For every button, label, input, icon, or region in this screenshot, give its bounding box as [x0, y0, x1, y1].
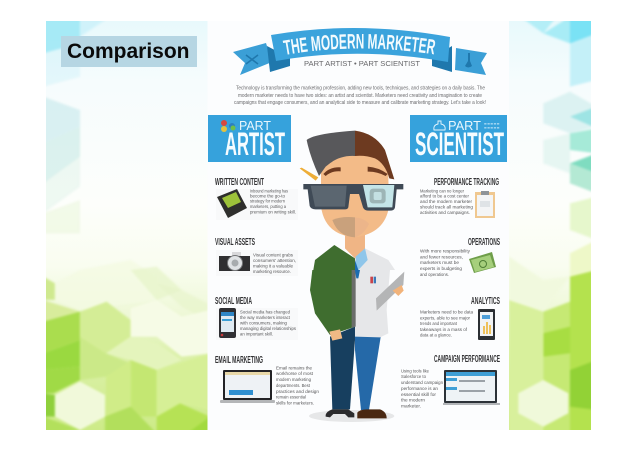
- section: email marketing: modern marketing: [276, 377, 311, 383]
- section: operations: With more responsibility: [420, 248, 471, 254]
- slide background: [43, 17, 597, 433]
- section: analytics: data at a glance.: [420, 332, 452, 338]
- icon: money: [469, 252, 496, 273]
- section: email marketing: EMAIL MARKETING: [215, 355, 263, 366]
- part scientist banner: ▪▪▪▪▪: [484, 121, 501, 126]
- section: campaign performance: essential skill for: [401, 392, 436, 398]
- section: written content: strategy for modern: [250, 198, 285, 204]
- infographic panel: [208, 21, 509, 430]
- right geometric panel: [509, 17, 597, 433]
- section: performance tracking: activities and campaigns.: [420, 210, 470, 216]
- section: written content: WRITTEN CONTENT: [215, 177, 264, 188]
- part artist banner: [208, 115, 291, 162]
- section: analytics: Marketers need to be data: [420, 310, 473, 316]
- section: email marketing: [215, 355, 319, 406]
- section: analytics: [420, 296, 500, 340]
- section: operations: marketers must be: [420, 260, 459, 266]
- section: operations: experts in budgeting: [420, 266, 462, 272]
- section: email marketing: Email remains the: [276, 366, 312, 372]
- infographic panel: PERFORMANCE TRACKING: [434, 177, 499, 188]
- section: email marketing: workhorse of most: [276, 371, 314, 377]
- section: visual assets: VISUAL ASSETS: [215, 237, 255, 248]
- section: analytics: takeaways in a mass of: [420, 327, 468, 333]
- section: email marketing: departments. Best: [276, 383, 311, 389]
- intro paragraph: campaigns that engage consumers, and an analytical side to measure and calibrate marketing strategy. Let's take a look!: [234, 100, 486, 106]
- section: performance tracking: afford to be a cost center: [420, 194, 469, 200]
- section: performance tracking: and the modern marketer: [420, 199, 472, 205]
- section: operations: and operations.: [420, 272, 449, 278]
- icon: laptop dashboard: [443, 370, 500, 405]
- section: analytics: experts, able to see major: [420, 316, 470, 322]
- icon: phone: [219, 308, 236, 338]
- intro paragraph: modern marketer needs to have two sides: an artist and scientist. Marketers need creativity and imagination to create: [238, 93, 482, 99]
- figure: half artist half scientist: [300, 131, 404, 422]
- icon: laptop: [220, 370, 275, 403]
- section: operations: [420, 237, 500, 278]
- section: operations: and fewer resources,: [420, 254, 463, 260]
- section: visual assets: marketing resource.: [253, 269, 291, 275]
- icon: notebook: [217, 189, 247, 218]
- section: social media: SOCIAL MEDIA: [215, 296, 252, 307]
- section: visual assets: [215, 237, 298, 276]
- figure body: [309, 270, 404, 422]
- title text: THE MODERN MARKETER: [282, 34, 436, 54]
- section: visual assets: making it a valuable: [253, 264, 293, 270]
- icon: camera: [219, 252, 250, 271]
- comparison label: Comparison: [67, 40, 190, 63]
- section: email marketing: skills for marketers.: [276, 400, 314, 406]
- section: social media: an important skill.: [240, 332, 273, 338]
- section: campaign performance: Salesforce to: [401, 374, 426, 380]
- part artist banner: PART: [239, 118, 271, 133]
- section: analytics: trends and important: [420, 321, 458, 327]
- section: performance tracking: should track all marketing: [420, 204, 473, 210]
- section: campaign performance: the modern: [401, 398, 425, 404]
- section: email marketing: practices and design: [276, 389, 319, 395]
- infographic panel: CAMPAIGN PERFORMANCE: [434, 354, 500, 365]
- section: campaign performance: understand campaign: [401, 380, 443, 386]
- section: social media: [215, 296, 298, 340]
- figure head: [300, 131, 403, 270]
- section: campaign performance: Using tools like: [401, 368, 429, 374]
- section: social media: Social media has changed: [240, 310, 290, 316]
- section: written content: marketers, putting a: [250, 204, 286, 210]
- part scientist banner: PART: [448, 118, 481, 133]
- section: campaign performance: [401, 354, 500, 410]
- part artist banner: ARTIST: [225, 126, 285, 162]
- section: email marketing: remain essential: [276, 394, 306, 400]
- ribbon icons: [246, 55, 258, 64]
- section: performance tracking: Marketing can no longer: [420, 188, 464, 194]
- section: social media: managing digital relationships: [240, 326, 297, 332]
- icon: tablet: [478, 309, 495, 340]
- section: performance tracking: [420, 177, 499, 218]
- section: social media: with consumers, making: [240, 320, 287, 326]
- section: written content: become the go-to: [250, 194, 285, 200]
- infographic panel: OPERATIONS: [468, 237, 500, 248]
- section: written content: premium on writing skill.: [250, 210, 296, 216]
- section: visual assets: Visual content grabs: [253, 252, 294, 258]
- section: campaign performance: marketer.: [401, 404, 421, 410]
- section: social media: the way marketers interact: [240, 315, 291, 321]
- intro paragraph: Technology is transforming the marketing profession, adding new tools, techniques, and strategies on a daily basis. The: [236, 86, 485, 92]
- title ribbon: [233, 28, 487, 75]
- left geometric panel: [43, 17, 210, 433]
- part scientist banner: SCIENTIST: [415, 126, 504, 162]
- part scientist banner: ▪▪▪▪▪: [484, 125, 501, 130]
- icon: clipboard: [475, 191, 495, 218]
- section: written content: Inbound marketing has: [250, 188, 288, 194]
- intro paragraph: [234, 86, 486, 106]
- section: analytics: ANALYTICS: [471, 296, 500, 307]
- section: written content: [215, 177, 298, 220]
- section: visual assets: consumers' attention,: [253, 258, 296, 264]
- comparison label: [61, 36, 197, 67]
- subtitle: PART ARTIST • PART SCIENTIST: [304, 59, 420, 68]
- part scientist banner: [410, 115, 507, 162]
- section: campaign performance: performance is an: [401, 386, 438, 392]
